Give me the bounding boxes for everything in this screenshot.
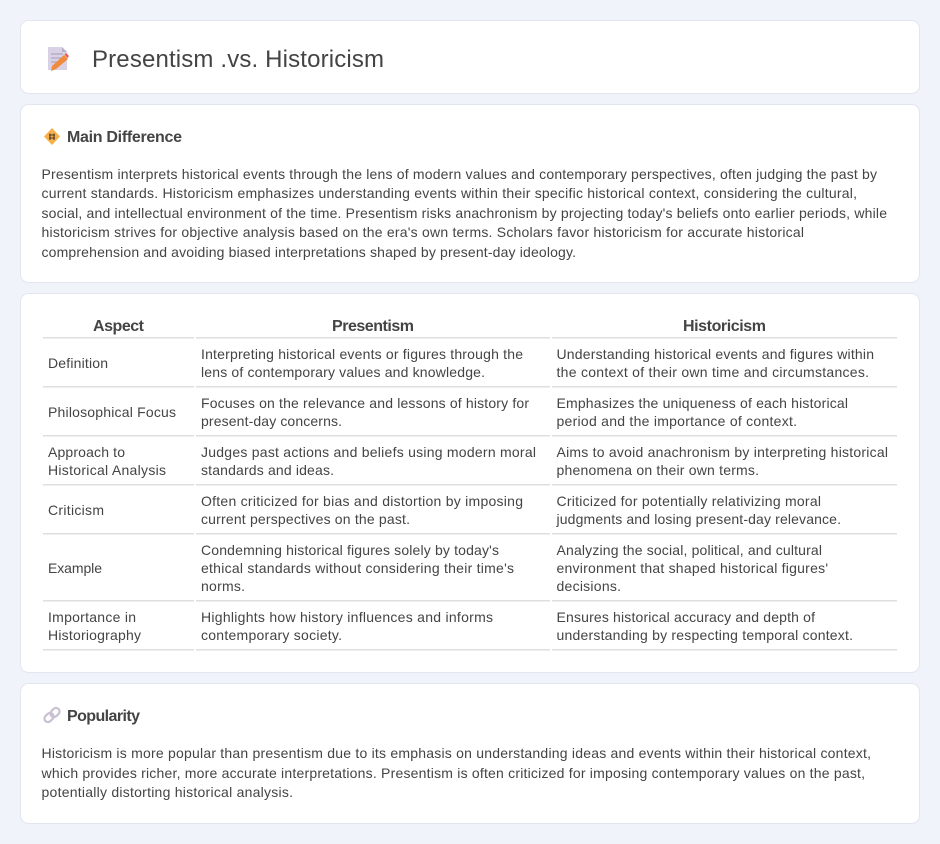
table row: philosophical focus: period and the importance of context.: [556, 413, 797, 429]
table row: philosophical focus: Emphasizes the uniqueness of each historical: [556, 395, 848, 411]
text block: main difference paragraph: [42, 166, 887, 260]
panel: title card: [20, 20, 920, 94]
table row: approach to historical analysis: [43, 444, 897, 486]
text block: popularity paragraph: potentially distorting historical analysis.: [42, 784, 293, 800]
panel: main difference: [20, 104, 920, 282]
table header: Aspect: [93, 318, 145, 335]
table row: example: norms.: [201, 578, 245, 594]
table row: philosophical focus: Focuses on the relevance and lessons of history for: [201, 395, 529, 411]
icon: chain link: [43, 706, 61, 724]
table row: definition: Understanding historical events and figures within: [556, 346, 874, 362]
table row: importance in historiography: [43, 609, 897, 650]
table row: importance in historiography: Historiography: [48, 627, 141, 643]
text block: main difference paragraph: social, and intellectual environment of the time. Presentism risks anachronism by projecting today's beliefs onto earlier periods, while: [42, 205, 887, 221]
table row: philosophical focus: present-day concerns.: [201, 413, 342, 429]
text block: main difference paragraph: Presentism interprets historical events through the lens of modern values and contemporary perspectives, often judging the past by: [42, 166, 877, 182]
panel: comparison table: [20, 294, 920, 672]
table row: importance in historiography: Ensures historical accuracy and depth of: [556, 609, 815, 625]
table row: definition: the context of their own time and circumstances.: [556, 364, 869, 380]
table row: criticism: Criticized for potentially relativizing moral: [556, 493, 821, 509]
table header: [43, 318, 897, 338]
text block: popularity paragraph: which provides richer, more accurate interpretations. Presentism is often criticized for imposing contemporary values on the past,: [40, 765, 865, 781]
table row: example: Example: [48, 560, 102, 576]
table row: approach to historical analysis: Aims to avoid anachronism by interpreting historical: [556, 444, 888, 460]
table row: approach to historical analysis: standards and ideas.: [201, 462, 334, 478]
table row: approach to historical analysis: Approach to: [48, 444, 125, 460]
heading: main difference: Main Difference: [67, 129, 182, 146]
table row: criticism: Criticism: [48, 502, 104, 518]
table row: example: ethical standards without considering their time's: [201, 560, 514, 576]
text block: main difference paragraph: comprehension and avoiding biased interpretations shaped by present-day ideology.: [42, 244, 576, 260]
table row: criticism: Often criticized for bias and distortion by imposing: [201, 493, 523, 509]
table row: criticism: current perspectives on the past.: [201, 511, 410, 527]
table row: approach to historical analysis: Judges past actions and beliefs using modern moral: [201, 444, 536, 460]
table row: importance in historiography: Highlights how history influences and informs: [201, 609, 493, 625]
table row: approach to historical analysis: Historical Analysis: [48, 462, 166, 478]
table row: example: decisions.: [556, 578, 621, 594]
table row: criticism: [43, 493, 897, 534]
table row: example: Condemning historical figures solely by today's: [201, 542, 499, 558]
icon: orange diamond: [44, 128, 60, 145]
icon: document with pencil: [48, 47, 69, 71]
table row: definition: Definition: [48, 355, 108, 371]
table row: philosophical focus: Philosophical Focus: [48, 404, 176, 420]
table header: Presentism: [332, 318, 414, 335]
table row: definition: lens of contemporary values and knowledge.: [201, 364, 485, 380]
table row: definition: Interpreting historical events or figures through the: [201, 346, 523, 362]
table row: example: environment that shaped historical figures': [556, 560, 828, 576]
text block: main difference paragraph: current standards. Historicism emphasizes understanding events within their specific historical context, considering the cultural,: [42, 185, 857, 201]
table row: example: Analyzing the social, political, and cultural: [556, 542, 822, 558]
table row: importance in historiography: contemporary society.: [201, 627, 342, 643]
table row: importance in historiography: Importance in: [48, 609, 136, 625]
table row: philosophical focus: [43, 395, 897, 436]
table row: example: [43, 542, 897, 602]
table row: criticism: judgments and losing present-day relevance.: [556, 511, 841, 527]
title: Presentism .vs. Historicism: [92, 46, 384, 73]
table row: importance in historiography: understanding by respecting temporal context.: [556, 627, 853, 643]
table row: approach to historical analysis: phenomena on their own terms.: [556, 462, 759, 478]
text block: popularity paragraph: Historicism is more popular than presentism due to its emphasis on understanding ideas and events within their historical context,: [42, 745, 871, 761]
panel: popularity: [20, 684, 920, 824]
text block: popularity paragraph: [40, 745, 871, 800]
table header: Historicism: [683, 318, 766, 335]
heading: popularity: Popularity: [67, 708, 140, 725]
text block: main difference paragraph: historicism strives for objective analysis based on the era's own terms. Scholars favor historicism for accurate historical: [42, 224, 804, 240]
table row: definition: [43, 346, 897, 388]
